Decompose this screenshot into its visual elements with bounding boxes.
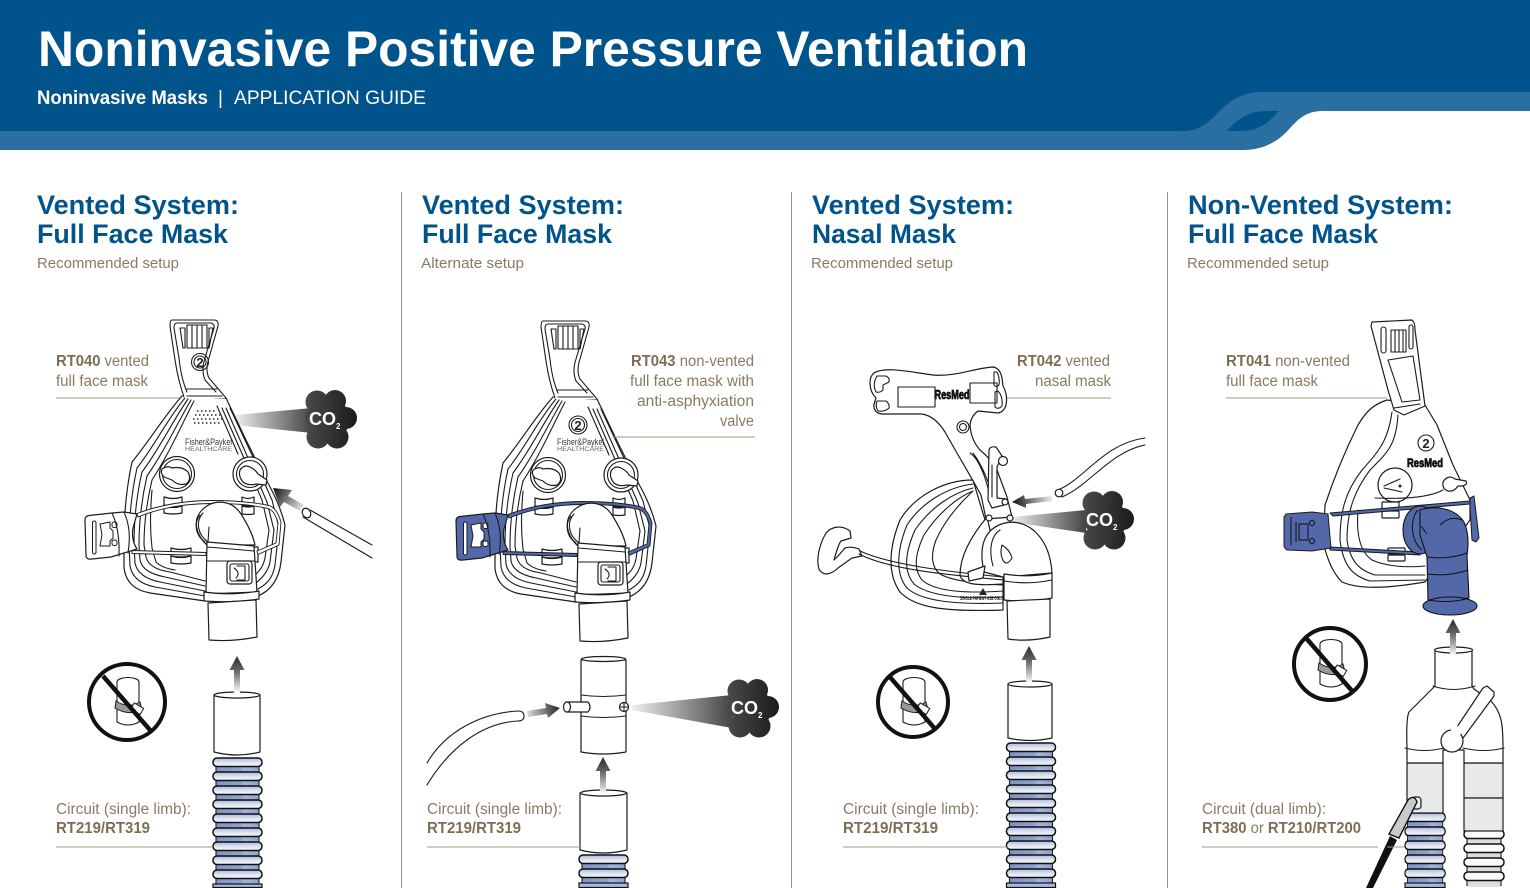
CO2 cloud: CO: [731, 698, 758, 718]
mask label: RT043 non-vented: [631, 353, 754, 370]
blue elbow: [1403, 506, 1477, 615]
heading: Vented System:: [37, 190, 239, 220]
mask label: nasal mask: [1035, 373, 1111, 390]
no filter icon: [1294, 628, 1366, 700]
mask label: full face mask: [56, 373, 148, 390]
elbow: [982, 522, 1052, 577]
heading: Full Face Mask: [1188, 219, 1379, 249]
panel: vented nasal recommended: [811, 190, 1145, 888]
circuit label: RT219/RT319: [56, 820, 150, 837]
CO2 cloud: 2: [1113, 523, 1118, 532]
mask illustration: 2: [196, 355, 204, 370]
arrow to oxygen port: [1012, 495, 1052, 508]
mask label: [612, 353, 755, 437]
warning mark: [979, 588, 987, 595]
CO2 cloud: [727, 679, 779, 738]
cushion: [891, 480, 1003, 610]
heading: [812, 190, 1014, 249]
heading: [37, 190, 239, 249]
mask label: RT042 vented: [1017, 353, 1110, 370]
circuit label: Circuit (single limb):: [427, 801, 562, 818]
CO2 cloud: 2: [758, 711, 763, 720]
mask label: full face mask with: [630, 373, 754, 390]
nasal mask illustration: SINGLE PATIENT USE ONLY: [960, 596, 1003, 602]
heading: Nasal Mask: [812, 219, 957, 249]
mask illustration: 2: [574, 418, 582, 433]
arrow to oxygen port: [527, 703, 560, 718]
circuit tube: [213, 656, 262, 888]
subtitle: |: [218, 88, 223, 109]
circuit label: Circuit (single limb):: [56, 801, 191, 818]
swivel: [970, 453, 990, 495]
circuit label: RT219/RT319: [843, 820, 938, 837]
CO2 cloud: 2: [336, 422, 341, 431]
header banner: [0, 0, 1530, 150]
title: Noninvasive Positive Pressure Ventilation: [38, 21, 1028, 77]
side-view mask illustration: ResMed: [1407, 456, 1443, 470]
heading: Full Face Mask: [422, 219, 613, 249]
mask label: RT040 vented: [56, 353, 149, 370]
mask label: [1005, 353, 1111, 398]
heading: [1188, 190, 1453, 249]
circuit label: Circuit (single limb):: [843, 801, 979, 818]
side-view mask illustration: [1284, 320, 1479, 615]
CO2 exhaust cone: [632, 695, 732, 728]
subtitle: Noninvasive Masks: [37, 88, 208, 109]
dual limb Y-piece: [1366, 619, 1504, 888]
panel: non-vented full face: [1187, 190, 1504, 888]
mask label: [56, 353, 182, 398]
heading: Vented System:: [422, 190, 624, 220]
heading: [422, 190, 624, 249]
setup note: Recommended setup: [37, 255, 179, 272]
oxygen tube: [301, 507, 372, 558]
mask illustration: [85, 320, 285, 641]
circuit label: [1202, 801, 1405, 847]
oxygen tube: [427, 711, 524, 785]
mask label: full face mask: [1226, 373, 1318, 390]
heading: Non-Vented System:: [1188, 190, 1453, 220]
mask label: anti-asphyxiation: [637, 393, 754, 410]
circuit tube: [1006, 646, 1056, 888]
forehead support: [870, 367, 1012, 519]
circuit tube: [579, 757, 628, 888]
mask label: [1226, 353, 1387, 398]
mask label: RT041 non-vented: [1226, 353, 1350, 370]
side-view mask illustration: 2: [1422, 436, 1430, 451]
CO2 cloud: [305, 390, 357, 448]
setup note: Recommended setup: [1187, 255, 1329, 272]
heading: Vented System:: [812, 190, 1014, 220]
CO2 cloud: CO: [1086, 510, 1113, 530]
CO2 exhaust cone: [235, 408, 312, 433]
panel: vented full face recommended: [37, 190, 372, 888]
no filter icon: [878, 667, 948, 737]
no filter icon: [89, 664, 165, 740]
subtitle: APPLICATION GUIDE: [234, 88, 426, 109]
oxygen tube: [1055, 438, 1145, 497]
circuit label: [843, 801, 1008, 847]
CO2 cloud: CO: [309, 409, 336, 429]
CO2 exhaust cone: [1012, 510, 1086, 533]
circuit label: [427, 801, 580, 847]
setup note: Alternate setup: [421, 255, 524, 272]
panel: vented full face alternate: [421, 190, 779, 888]
mask illustration: [456, 321, 656, 642]
arrow to oxygen port: [273, 488, 304, 511]
body: [1323, 400, 1470, 587]
circuit label: RT380 or RT210/RT200: [1202, 820, 1361, 837]
circuit label: [56, 801, 213, 847]
circuit label: Circuit (dual limb):: [1202, 801, 1326, 818]
CO2 cloud: [1082, 491, 1134, 550]
setup note: Recommended setup: [811, 255, 953, 272]
nasal mask illustration: [818, 367, 1052, 640]
connector with oxygen port: [564, 656, 628, 754]
tab: [1371, 320, 1425, 415]
probe: [1412, 797, 1421, 809]
mask label: valve: [720, 413, 754, 430]
chin strap: [818, 527, 862, 574]
heading: Full Face Mask: [37, 219, 229, 249]
nasal mask illustration: ResMed: [934, 387, 970, 402]
blue headgear strap: [1284, 496, 1479, 555]
circuit label: RT219/RT319: [427, 820, 521, 837]
